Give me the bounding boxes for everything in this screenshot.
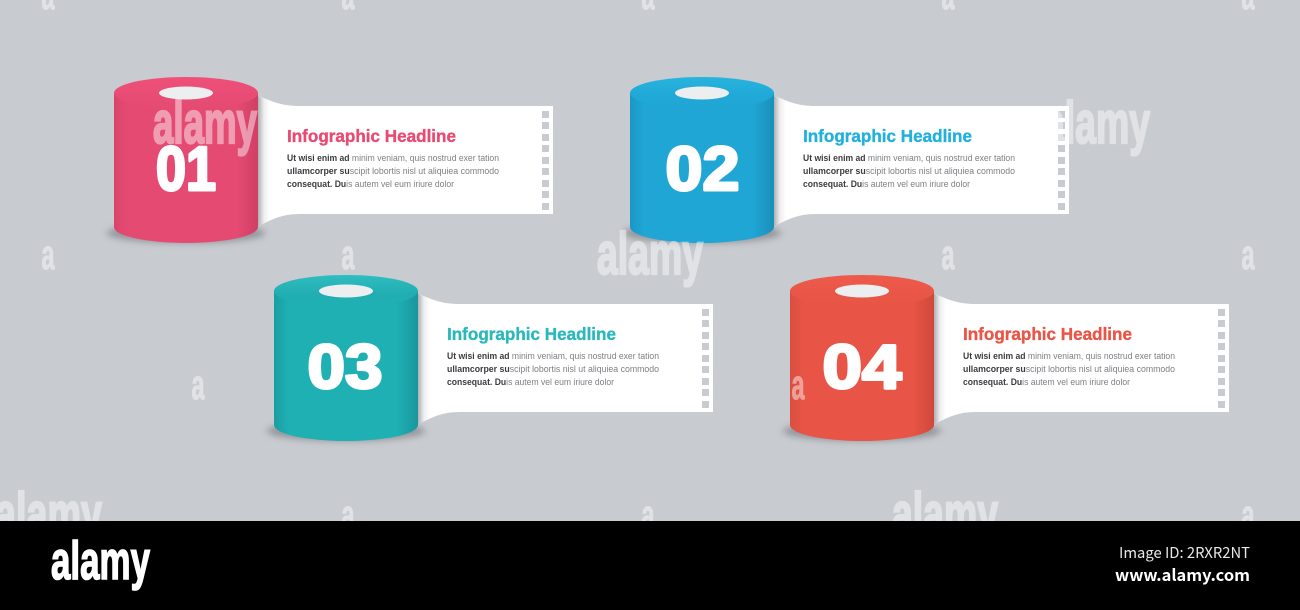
watermarks: alamy [1044, 90, 1150, 156]
watermarks: a [42, 231, 55, 278]
watermarks: alamy [597, 221, 703, 287]
body text 02 [803, 153, 1015, 189]
body text 02: Ut wisi enim ad minim veniam, quis nostrud exer tation [803, 153, 1015, 163]
body text 02: consequat. Duis autem vel eum iriure dolor [803, 179, 970, 189]
watermarks: alamy [892, 481, 998, 547]
body text 04: ullamcorper suscipit lobortis nisl ut aliquiea commodo [963, 364, 1175, 374]
body text 02: ullamcorper suscipit lobortis nisl ut aliquiea commodo [803, 166, 1015, 176]
paper strip 01 [258, 96, 553, 226]
watermarks: a [342, 231, 355, 278]
item 01 [107, 77, 553, 243]
number 03: 03 [308, 333, 382, 402]
paper strip 03 [418, 294, 713, 424]
headline 01: Infographic Headline [287, 126, 456, 146]
roll shadow 03 [267, 421, 425, 441]
watermarks: a [342, 491, 355, 538]
perforations 04 [1218, 309, 1225, 408]
perforations 01 [542, 111, 549, 210]
number 04: 04 [822, 333, 902, 402]
paper fold shade 03 [418, 294, 430, 424]
watermarks: alamy [0, 481, 102, 547]
paper strip 02 [774, 96, 1069, 226]
watermarks: a [642, 491, 655, 538]
item 02 [623, 77, 1069, 243]
paper fold shade 01 [258, 96, 270, 226]
body text 01: ullamcorper suscipit lobortis nisl ut aliquiea commodo [287, 166, 499, 176]
body text 04: Ut wisi enim ad minim veniam, quis nostrud exer tation [963, 351, 1175, 361]
paper fold shade 04 [934, 294, 946, 424]
headline 03: Infographic Headline [447, 324, 616, 344]
body text 03 [447, 351, 659, 387]
cylinder 01 [114, 77, 258, 243]
watermarks: alamy [153, 90, 257, 156]
body text 04 [963, 351, 1175, 387]
number 01: 01 [156, 135, 216, 204]
roll shadow 02 [623, 223, 781, 243]
cylinder 04 [790, 275, 934, 441]
paper fold shade 02 [774, 96, 786, 226]
watermarks: a [1242, 491, 1255, 538]
headline 02: Infographic Headline [803, 126, 972, 146]
cylinder 02 [630, 77, 774, 243]
watermarks: a [1242, 231, 1255, 278]
footer bar [0, 521, 1300, 610]
website: www.alamy.com [1115, 562, 1250, 586]
image id: Image ID: 2RXR2NT [1119, 542, 1250, 563]
watermarks: a [942, 231, 955, 278]
body text 04: consequat. Duis autem vel eum iriure dolor [963, 377, 1130, 387]
watermarks: a [192, 361, 205, 408]
body text 03: consequat. Duis autem vel eum iriure dolor [447, 377, 614, 387]
perforations 03 [702, 309, 709, 408]
body text 01: consequat. Duis autem vel eum iriure dolor [287, 179, 454, 189]
item 03 [267, 275, 713, 441]
body text 01 [287, 153, 499, 189]
item 04 [783, 275, 1229, 441]
body text 03: Ut wisi enim ad minim veniam, quis nostrud exer tation [447, 351, 659, 361]
paper strip 04 [934, 294, 1229, 424]
headline 04: Infographic Headline [963, 324, 1132, 344]
body text 03: ullamcorper suscipit lobortis nisl ut aliquiea commodo [447, 364, 659, 374]
roll shadow 01 [107, 223, 265, 243]
footer logo: alamy [51, 531, 150, 591]
watermarks: a [792, 361, 805, 408]
cylinder 03 [274, 275, 418, 441]
number 02: 02 [666, 135, 740, 204]
body text 01: Ut wisi enim ad minim veniam, quis nostrud exer tation [287, 153, 499, 163]
roll shadow 04 [783, 421, 941, 441]
perforations 02 [1058, 111, 1065, 210]
